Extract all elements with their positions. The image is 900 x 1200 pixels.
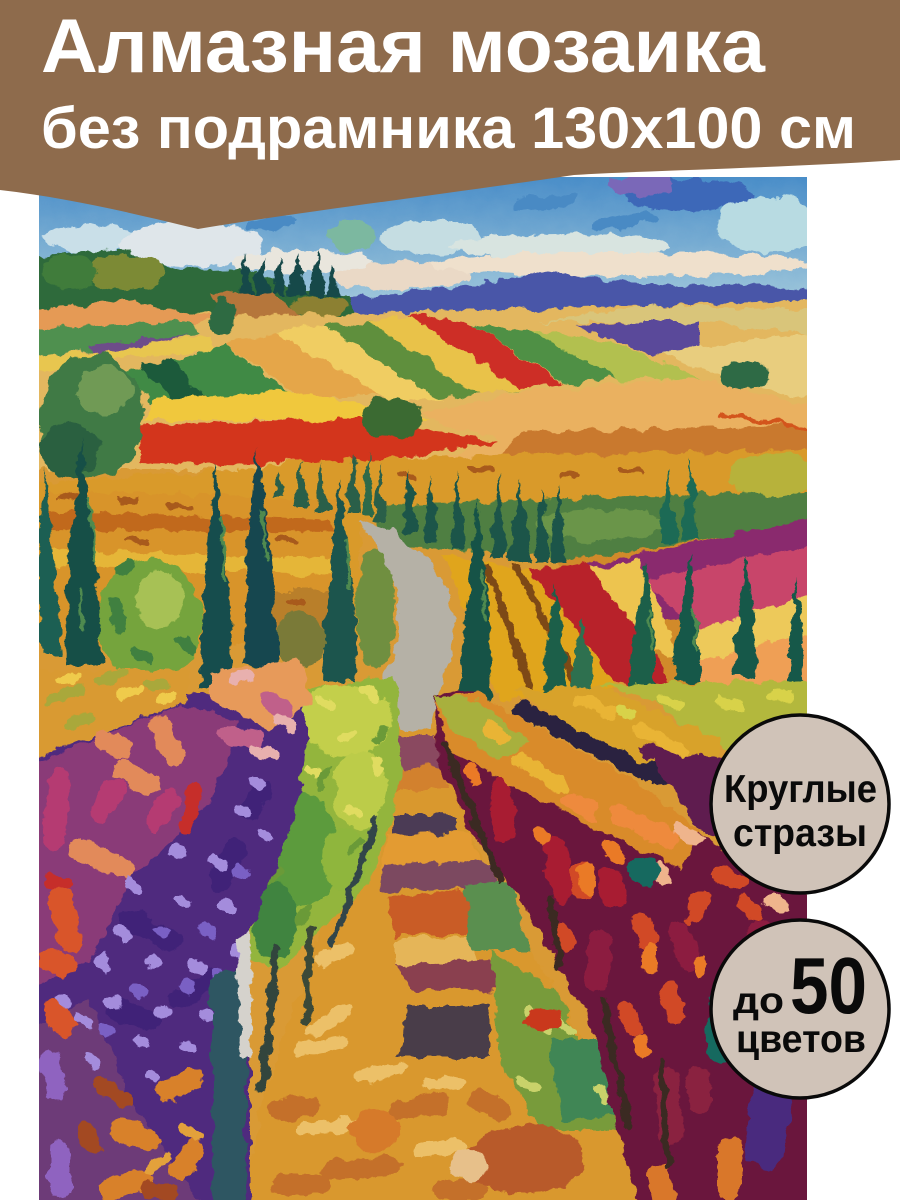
badge: up to 50 colours: до [733, 980, 784, 1021]
distant vineyard band [25, 450, 820, 640]
sky with clouds [39, 177, 807, 300]
mid-left vineyard [40, 468, 638, 682]
badge: up to 50 colours: цветов [736, 1018, 866, 1061]
rolling striped fields [25, 292, 820, 470]
left tree line on the horizon [25, 250, 355, 322]
right background fields [380, 453, 820, 700]
badge: round rhinestones: Круглые [724, 768, 877, 811]
distant mountains [350, 271, 807, 316]
winding road [358, 522, 458, 732]
badge: up to 50 colours: 50 [790, 941, 867, 1030]
badge: round rhinestones [711, 715, 889, 893]
header banner [0, 0, 900, 229]
golden hill [488, 386, 741, 448]
badge: round rhinestones: стразы [733, 812, 867, 855]
title line 2: без подрамника 130х100 см [41, 96, 856, 161]
title line 1: Алмазная мозаика [41, 4, 766, 89]
red field [138, 418, 500, 465]
left round tree [40, 353, 144, 478]
left grape vines [25, 660, 312, 1200]
badge: up to 50 colours [711, 920, 889, 1098]
foreground central path [240, 730, 660, 1200]
cypress trees [36, 440, 805, 702]
painting: vineyard landscape [20, 160, 830, 1200]
green vine row [250, 675, 402, 1085]
right vine rows [435, 680, 820, 1200]
